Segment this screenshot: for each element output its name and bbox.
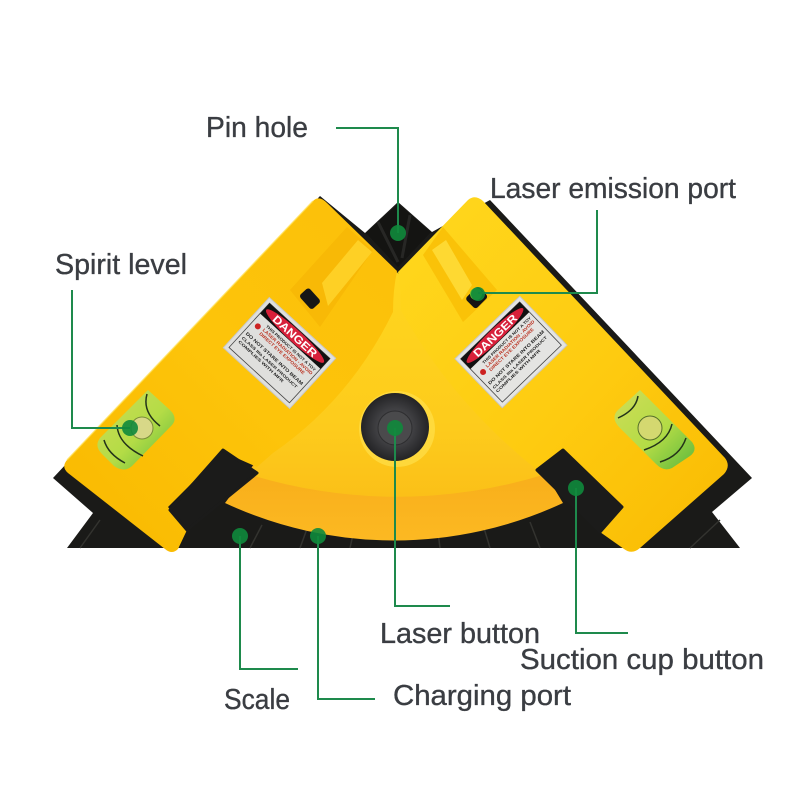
callout: Laser button [380, 420, 540, 650]
callout: Spirit level [55, 249, 187, 436]
suction cup button [170, 450, 257, 530]
central fan body [225, 272, 563, 540]
right yellow arm [398, 197, 728, 552]
black base square [53, 196, 752, 548]
spirit level vial [97, 390, 175, 470]
danger sticker: DANGER [471, 312, 520, 360]
laser button [359, 391, 435, 467]
danger sticker [223, 298, 336, 408]
suction cup button [537, 450, 622, 532]
callout: Charging port [310, 528, 571, 712]
danger sticker: THIS PRODUCT IS NOT A TOY [481, 315, 532, 365]
callout: Scale: Scale [224, 684, 290, 716]
callout: Suction cup button: Suction cup button [520, 644, 764, 676]
danger sticker: DO NOT STARE INTO BEAM [487, 329, 546, 386]
port channel [423, 227, 497, 322]
danger sticker: COMPLIES WITH MFR [495, 348, 542, 394]
callout: Pin hole: Pin hole [206, 112, 308, 144]
callout: Scale [224, 528, 298, 716]
callout: Spirit level: Spirit level [55, 249, 187, 281]
danger sticker: DANGER [270, 313, 319, 360]
danger sticker: CLASS IIIa LASER PRODUCT [241, 335, 299, 390]
danger sticker: LASER RADIATION - AVOID [485, 319, 536, 369]
danger sticker: THIS PRODUCT IS NOT A TOY [265, 324, 317, 372]
callout: Suction cup button [520, 480, 764, 676]
danger sticker: CLASS IIIa LASER PRODUCT [491, 334, 549, 390]
danger sticker [455, 296, 567, 408]
danger sticker: DIRECT EYE EXPOSURE [258, 331, 306, 375]
danger sticker: LASER RADIATION - AVOID [262, 327, 314, 376]
danger sticker: DIRECT EYE EXPOSURE [488, 327, 535, 372]
callout: Laser button: Laser button [380, 618, 540, 650]
device: laser level illustration [53, 196, 752, 552]
danger sticker: COMPLIES WITH MFR [237, 339, 285, 383]
danger sticker: DO NOT STARE INTO BEAM [245, 331, 304, 386]
port channel [290, 227, 373, 327]
left yellow arm [64, 198, 397, 552]
callout: Pin hole [206, 112, 406, 241]
callout: Charging port: Charging port [393, 680, 571, 712]
callout: Laser emission port [471, 173, 736, 301]
spirit level vial [614, 390, 695, 469]
callout: Laser emission port: Laser emission port [490, 173, 736, 205]
